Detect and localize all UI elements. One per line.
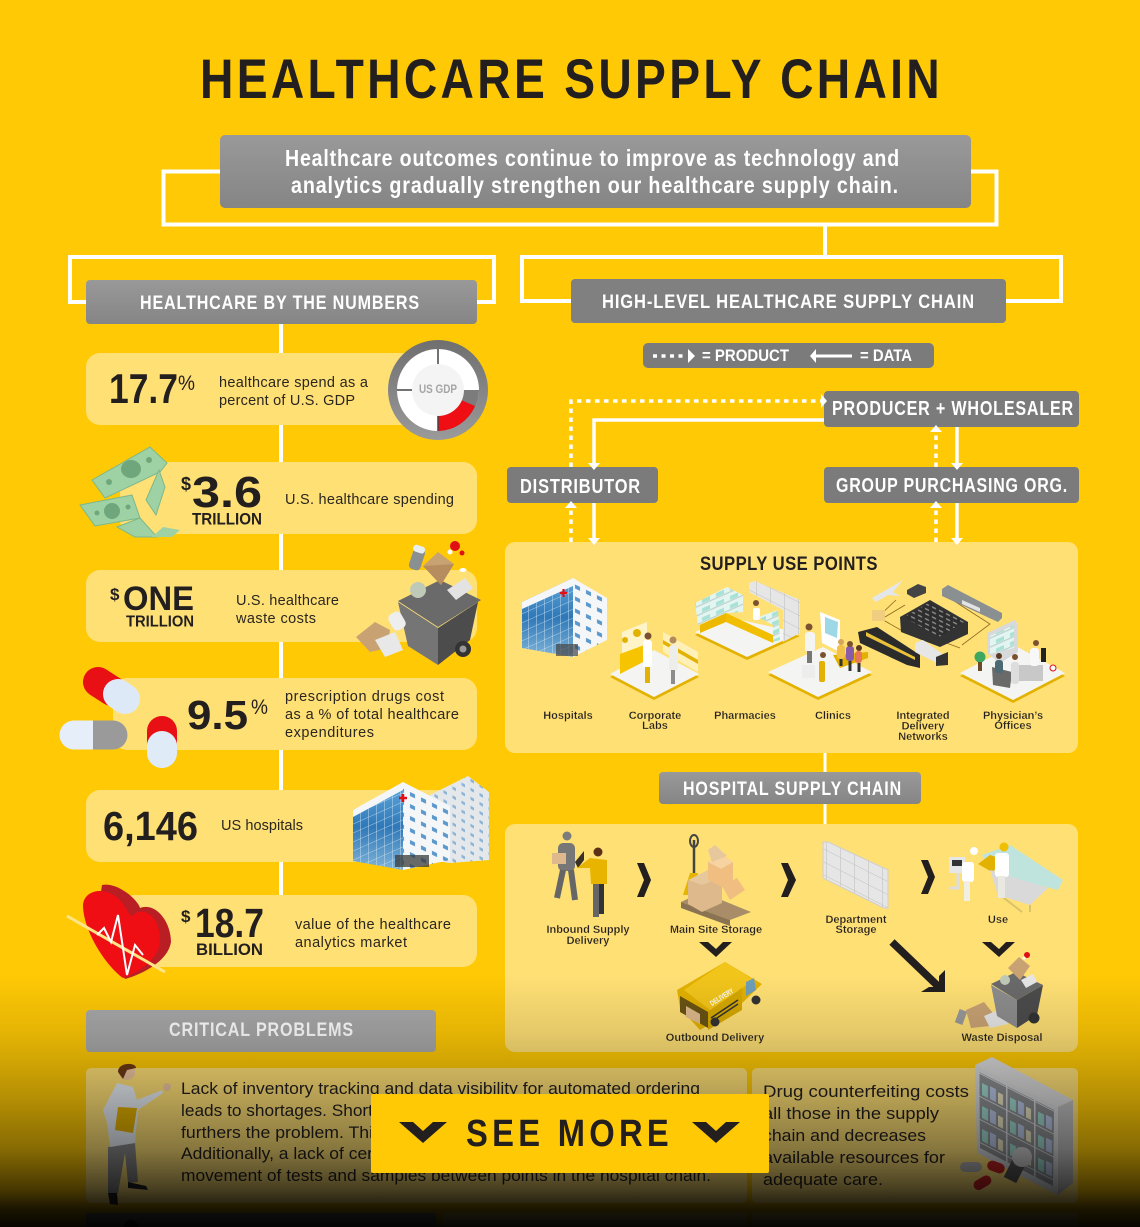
- flow arrows: product and data: [565, 394, 963, 545]
- intro text box: [220, 135, 971, 208]
- icon: trash bin: [356, 541, 481, 665]
- stat: 17.7 percent GDP: 17.7: [109, 365, 178, 412]
- stat: 18.7 billion analytics: $: [181, 907, 191, 926]
- stat: 18.7 billion analytics: BILLION: [196, 940, 263, 959]
- scene: outbound delivery van: [677, 962, 762, 1030]
- scene: clinics: [768, 612, 872, 700]
- labels: use points: Hospitals: [543, 710, 593, 722]
- arrow: chevron: [781, 863, 796, 897]
- arrow: chevron down, main storage: [699, 942, 732, 957]
- text: problem description: leads to shortages. Short: [181, 1101, 373, 1120]
- labels: hospital chain: Inbound Supply: [546, 924, 630, 936]
- labels: use points: Clinics: [815, 710, 851, 722]
- legend: = PRODUCT: [702, 347, 789, 365]
- legend: = DATA: [860, 347, 912, 365]
- heading: supply use points: SUPPLY USE POINTS: [700, 554, 878, 575]
- legend: [643, 343, 934, 368]
- labels: hospital chain: Waste Disposal: [962, 1032, 1042, 1044]
- stat: 6,146 hospitals: 6,146: [103, 803, 198, 849]
- scene: outbound delivery van: DELIVERY: [708, 986, 735, 1008]
- stat: 18.7 billion analytics: analytics market: [295, 935, 407, 951]
- button label: SEE MORE: [466, 1113, 673, 1155]
- icon: US GDP donut: [388, 340, 488, 440]
- panel: supply use points: [505, 542, 1078, 753]
- stat: 17.7 percent GDP: %: [178, 372, 195, 395]
- scene: waste disposal: [955, 952, 1043, 1028]
- node: distributor: [507, 467, 658, 503]
- connector brackets: [70, 172, 1061, 895]
- arrow: chevron: [637, 863, 651, 897]
- node: group purchasing org: GROUP PURCHASING ORG.: [836, 475, 1068, 497]
- stat: 3.6 trillion: TRILLION: [192, 510, 262, 528]
- title: HEALTHCARE SUPPLY CHAIN: [200, 47, 943, 110]
- text: counterfeiting: available resources for: [763, 1148, 945, 1167]
- stat: 9.5 percent drugs: expenditures: [285, 725, 374, 741]
- text: problem description: furthers the problem. Thi: [181, 1123, 373, 1142]
- panel: drug counterfeiting: [752, 1057, 1078, 1203]
- illustration: doctor: [103, 1064, 171, 1205]
- labels: hospital chain: Outbound Delivery: [666, 1032, 765, 1044]
- text: counterfeiting: Drug counterfeiting costs: [763, 1082, 969, 1101]
- scene: pharmacies: [695, 581, 800, 660]
- heading: hospital supply chain: HOSPITAL SUPPLY CHAIN: [683, 779, 902, 800]
- text: problem description: [181, 1079, 711, 1185]
- fade overlay: [0, 975, 1140, 1227]
- scene: hospital: [522, 578, 607, 657]
- stat: one trillion waste: U.S. healthcare: [236, 593, 339, 609]
- scene: physician's offices: [960, 620, 1065, 703]
- arrow: chevron down, use: [982, 942, 1015, 957]
- labels: use points: Labs: [642, 720, 668, 732]
- stat: 18.7 billion analytics: [120, 895, 477, 967]
- text: counterfeiting: all those in the supply: [763, 1104, 940, 1123]
- stat: 18.7 billion analytics: value of the healthcare: [295, 917, 451, 933]
- stat: 9.5 percent drugs: 9.5: [187, 692, 248, 738]
- labels: hospital chain: Use: [988, 914, 1008, 926]
- see more button: [371, 1094, 769, 1173]
- stat: one trillion waste: ONE: [123, 580, 194, 618]
- icon: heart with pulse: [67, 885, 171, 979]
- text: problem description: Additionally, a lack of cer: [181, 1144, 373, 1163]
- icon: US GDP donut: US GDP: [419, 384, 457, 396]
- heading: high-level healthcare supply chain: HIGH-LEVEL HEALTHCARE SUPPLY CHAIN: [602, 292, 975, 313]
- scene: integrated delivery networks: [858, 580, 1002, 668]
- text: counterfeiting: adequate care.: [763, 1170, 883, 1189]
- stat: 6,146 hospitals: [86, 790, 477, 862]
- scene: department storage: [823, 842, 888, 908]
- stat: 3.6 trillion: [120, 462, 477, 534]
- stat: one trillion waste: [86, 570, 477, 642]
- heading: high-level healthcare supply chain: [571, 279, 1006, 323]
- stat: one trillion waste: waste costs: [235, 611, 316, 627]
- labels: hospital chain: Department: [825, 914, 887, 926]
- scene: corporate labs: [610, 622, 699, 700]
- labels: use points: [543, 710, 1043, 743]
- labels: use points: Delivery: [902, 720, 945, 732]
- arrow: chevron: [921, 860, 935, 894]
- text: problem description: Lack of inventory tracking and data visibility for automated ordering: [181, 1079, 700, 1098]
- stat: 17.7 percent GDP: percent of U.S. GDP: [219, 393, 355, 409]
- scene: inbound supply delivery: [552, 832, 607, 917]
- stat: 9.5 percent drugs: [113, 678, 477, 750]
- stat: 9.5 percent drugs: as a % of total healthcare: [285, 707, 459, 723]
- text: counterfeiting: [763, 1082, 969, 1189]
- heading: critical problems: [86, 1010, 436, 1052]
- labels: hospital chain: Storage: [836, 924, 876, 936]
- labels: use points: Networks: [898, 731, 948, 743]
- next row, cut off: [86, 1213, 1078, 1227]
- icon: left chevron: [399, 1122, 447, 1143]
- labels: use points: Integrated: [896, 710, 950, 722]
- stat: 9.5 percent drugs: prescription drugs cost: [285, 689, 444, 705]
- stat: one trillion waste: $: [110, 585, 120, 604]
- node: group purchasing org: [824, 467, 1079, 503]
- heading: healthcare by the numbers: [86, 280, 477, 324]
- stat: 18.7 billion analytics: 18.7: [195, 900, 264, 946]
- heading: hospital supply chain: [659, 772, 921, 804]
- icon: money: [80, 447, 180, 537]
- labels: use points: Offices: [994, 720, 1032, 732]
- stat: one trillion waste: TRILLION: [126, 614, 194, 630]
- node: distributor: DISTRIBUTOR: [520, 476, 641, 498]
- panel: hospital supply chain: [505, 824, 1078, 1052]
- stat: 9.5 percent drugs: %: [251, 696, 268, 719]
- labels: hospital chain: [546, 914, 1042, 1044]
- stat: 17.7 percent GDP: healthcare spend as a: [219, 375, 369, 391]
- labels: use points: Corporate: [629, 710, 681, 722]
- illustration: medicine cabinet and magnifier: [960, 1057, 1073, 1195]
- stat: 6,146 hospitals: US hospitals: [221, 818, 303, 834]
- stat: 3.6 trillion: U.S. healthcare spending: [285, 492, 454, 508]
- stat: 3.6 trillion: $: [181, 474, 191, 494]
- scene: use: [949, 842, 1063, 912]
- panel: inventory problem: [86, 1064, 747, 1205]
- icon: hospital building: [353, 776, 489, 870]
- scene: main site storage: [681, 835, 751, 926]
- labels: hospital chain: Main Site Storage: [670, 924, 762, 936]
- icon: pills: [74, 682, 177, 768]
- heading: critical problems: CRITICAL PROBLEMS: [169, 1020, 354, 1041]
- text: problem description: movement of tests and samples between points in the hospital chain.: [181, 1166, 711, 1185]
- heading: healthcare by the numbers: HEALTHCARE BY THE NUMBERS: [140, 293, 420, 314]
- labels: use points: Physician’s: [983, 710, 1043, 722]
- intro text box: Healthcare outcomes continue to improve as technology and: [285, 145, 900, 171]
- labels: use points: Pharmacies: [714, 710, 776, 722]
- icon: right chevron: [692, 1122, 740, 1143]
- node: producer + wholesaler: PRODUCER + WHOLESALER: [832, 398, 1074, 420]
- arrow: diagonal to waste disposal: [892, 942, 945, 992]
- stat: 3.6 trillion: 3.6: [192, 468, 262, 517]
- node: producer + wholesaler: [824, 391, 1079, 427]
- text: counterfeiting: chain and decreases: [763, 1126, 926, 1145]
- stat: 17.7 percent GDP: [86, 353, 477, 425]
- intro text box: analytics gradually strengthen our healthcare supply chain.: [291, 172, 899, 198]
- labels: hospital chain: Delivery: [567, 935, 610, 947]
